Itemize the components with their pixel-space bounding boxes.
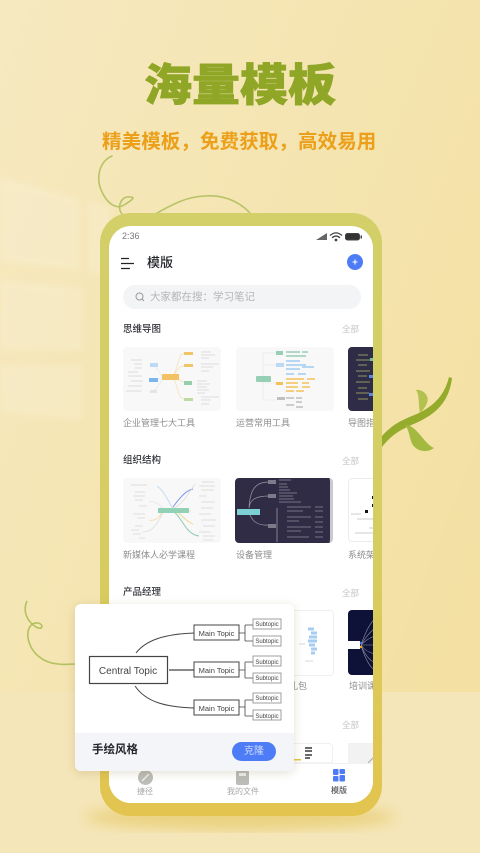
search bar: 大家都在搜：学习笔记 <box>150 291 255 303</box>
link: all: 全部 <box>342 456 359 466</box>
caption: 新媒体人必学课程 <box>123 550 195 560</box>
tab icon: templates <box>333 769 345 782</box>
mind map diagram: Subtopic <box>255 660 279 666</box>
thumbnail: equipment management <box>235 478 333 543</box>
caption: 礼包 <box>289 681 307 691</box>
link: all: 全部 <box>342 324 359 334</box>
vine on left <box>24 600 75 666</box>
clone button: 克隆 <box>244 746 264 757</box>
style name: 手绘风格 <box>92 744 138 756</box>
thumbnail: partially hidden card <box>236 610 334 676</box>
thumbnail: partial row right <box>348 743 378 771</box>
thumbnail: operations tools <box>236 347 334 411</box>
tab bar <box>109 763 373 804</box>
menu icon <box>121 258 134 270</box>
mind map diagram <box>88 618 282 720</box>
phone screen <box>109 226 373 803</box>
mind map diagram: Main Topic <box>199 666 235 675</box>
mind map diagram: Subtopic <box>255 714 279 720</box>
section heading: org structure: 组织结构 <box>123 455 161 466</box>
screen heading: 模版 <box>147 255 173 270</box>
mind map diagram: Main Topic <box>199 704 235 713</box>
caption: 设备管理 <box>236 550 272 560</box>
mind map diagram: Central Topic <box>99 666 157 677</box>
thumbnail: system architecture <box>348 478 446 542</box>
status icons <box>316 232 362 242</box>
mind map diagram: Subtopic <box>255 676 279 682</box>
mind map diagram: Subtopic <box>255 622 279 628</box>
clone button <box>232 742 276 761</box>
caption: 运营常用工具 <box>236 418 290 428</box>
subtitle: 精美模板，免费获取，高效易用 <box>102 125 376 154</box>
vine leaves on right <box>382 377 452 452</box>
card footer <box>75 733 294 771</box>
title: 海量模板 <box>144 49 336 113</box>
mind map diagram: Subtopic <box>255 639 279 645</box>
add button <box>347 254 363 270</box>
search bar <box>123 285 361 309</box>
phone frame <box>100 213 382 816</box>
floating card: hand-drawn style <box>75 604 294 771</box>
section heading: mind map: 思维导图 <box>123 324 161 335</box>
link: all: 全部 <box>342 588 359 598</box>
status time: 2:36 <box>122 231 140 241</box>
tab label: 我的文件 <box>227 787 259 796</box>
mind map diagram: Subtopic <box>255 696 279 702</box>
caption: 企业管理七大工具 <box>123 418 195 428</box>
thumbnail: training <box>348 610 446 675</box>
mind map diagram: Main Topic <box>199 629 235 638</box>
thumbnail: enterprise tools <box>123 347 221 411</box>
section heading: product manager: 产品经理 <box>123 587 161 598</box>
thumbnail: dark guide <box>348 347 446 411</box>
link: all: 全部 <box>342 720 359 730</box>
vine curl above phone <box>98 155 251 214</box>
tab label: 捷径 <box>137 787 153 796</box>
tab label active: 模版 <box>331 786 347 795</box>
tab icon: files <box>236 771 249 785</box>
thumbnail: new media course <box>123 478 221 543</box>
tab icon: shortcut <box>138 771 153 785</box>
thumbnail: partial row <box>279 743 333 771</box>
